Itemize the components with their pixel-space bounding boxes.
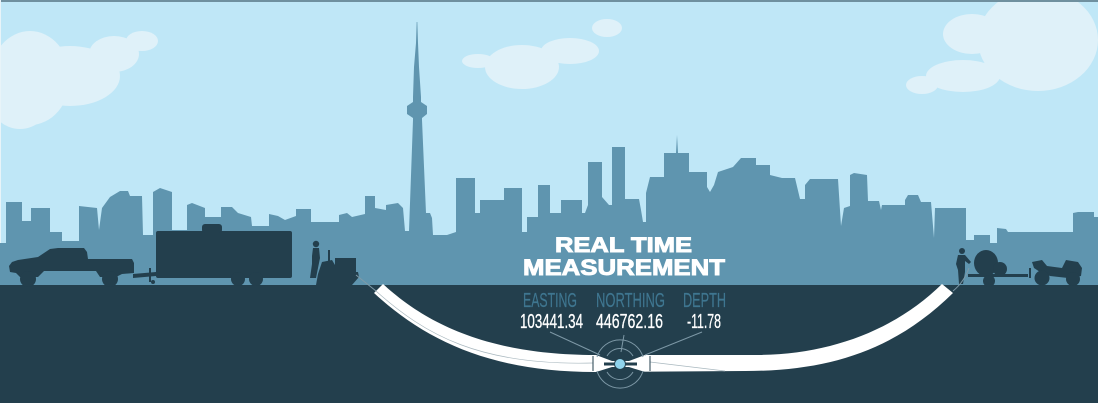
coordinate labels: DEPTH (683, 290, 726, 312)
locator rings (597, 340, 643, 388)
worker and drill machine (310, 241, 359, 285)
coordinate values: -11.78 (687, 311, 721, 333)
pointer lines (550, 332, 702, 355)
title: MEASUREMENT (523, 255, 726, 280)
coordinate labels (523, 290, 726, 312)
spool trailer (968, 250, 1031, 287)
cloud: right (906, 0, 1098, 94)
drill head (593, 340, 650, 388)
top edge line (0, 0, 1098, 2)
bore path (374, 284, 953, 372)
coordinate labels: EASTING (523, 290, 577, 312)
sensor disc (614, 358, 626, 370)
bore inner pipe line (376, 291, 725, 371)
trailer silhouette (133, 224, 292, 286)
right worker (956, 248, 971, 284)
title: REAL TIME (555, 234, 692, 257)
drill head marks (593, 356, 650, 371)
head dark cut-outs (596, 355, 645, 372)
cloud: left (0, 31, 158, 129)
left cable (356, 275, 376, 291)
coordinate labels: NORTHING (596, 290, 665, 312)
coordinate values: 103441.34 (520, 311, 583, 333)
ground (0, 285, 1098, 403)
truck silhouette (9, 248, 134, 287)
coordinate values: 446762.16 (596, 311, 663, 333)
coordinate values (520, 311, 721, 333)
title (523, 234, 726, 280)
left edge line (0, 0, 1, 403)
right cable (953, 268, 969, 291)
city skyline (0, 22, 1098, 290)
cloud: centre (462, 19, 622, 89)
ATV silhouette (1032, 260, 1082, 286)
